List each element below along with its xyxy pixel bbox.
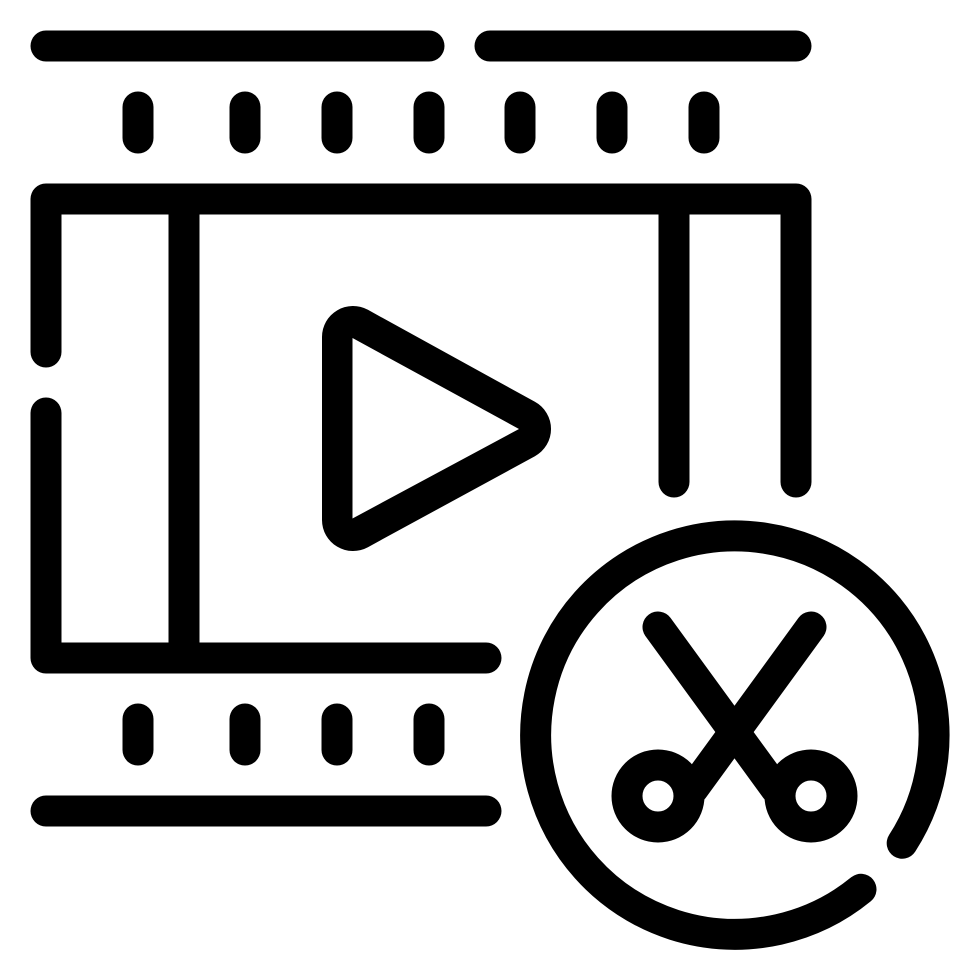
scissors badge circle — [536, 536, 934, 934]
bottom film edge line — [46, 796, 486, 826]
scissors — [627, 627, 842, 827]
top film edge lines — [46, 30, 796, 62]
bottom sprocket holes — [138, 719, 429, 750]
frame dividers — [184, 199, 674, 658]
film frame outline — [46, 199, 796, 658]
play button — [322, 306, 551, 551]
top sprocket holes — [138, 107, 704, 138]
